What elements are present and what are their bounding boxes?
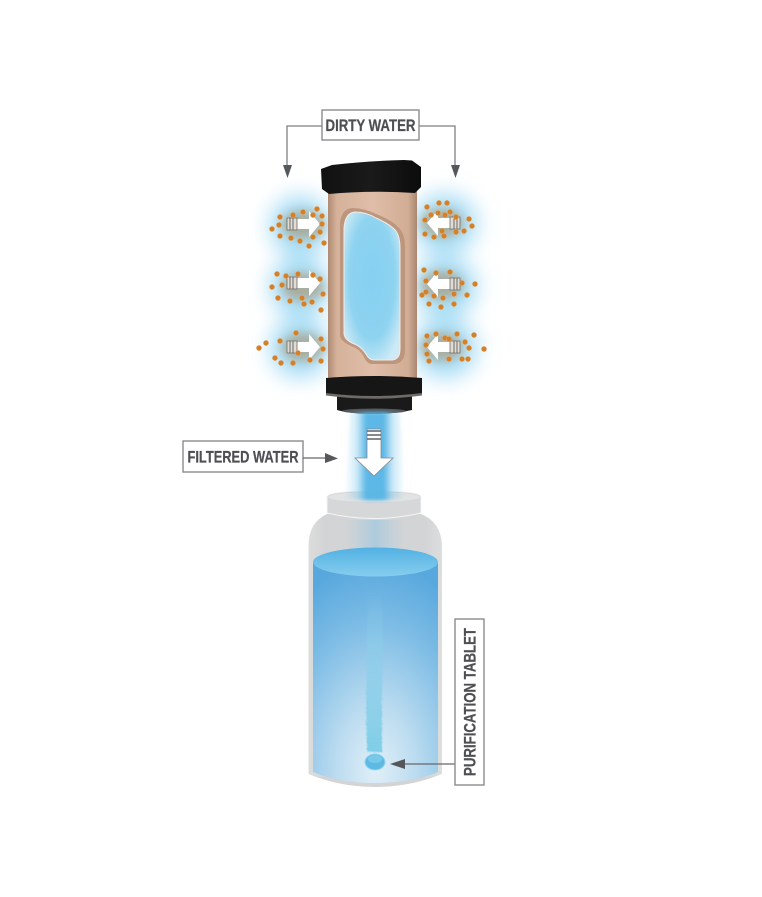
label: dirty water with arrows (283, 110, 460, 178)
label: filtered water with arrow (183, 441, 338, 472)
arrow: filtered water flowing down (355, 429, 393, 476)
beam of filtered water (345, 412, 405, 500)
filter cartridge (321, 160, 422, 414)
filter lower collar (326, 376, 422, 414)
water in bottle (313, 548, 438, 783)
bottle neck (327, 491, 421, 518)
label: purification tablet with arrow: PURIFICATION TABLET (460, 628, 480, 776)
bottle inner beam (345, 520, 405, 552)
label: purification tablet with arrow (390, 619, 484, 785)
arrows: dirty water flowing inward (287, 210, 460, 360)
contaminant particles (256, 200, 487, 366)
label: filtered water with arrow: FILTERED WATER (188, 448, 298, 466)
bottle body (308, 514, 442, 787)
purification tablet (365, 754, 385, 770)
tablet fizz trail (366, 590, 383, 752)
filter top cap (321, 160, 421, 194)
label: dirty water with arrows: DIRTY WATER (326, 116, 416, 135)
glow: blue water haze around filter (270, 194, 477, 378)
bottle (308, 491, 442, 787)
filter body (328, 188, 417, 380)
filter window with water (340, 208, 405, 364)
